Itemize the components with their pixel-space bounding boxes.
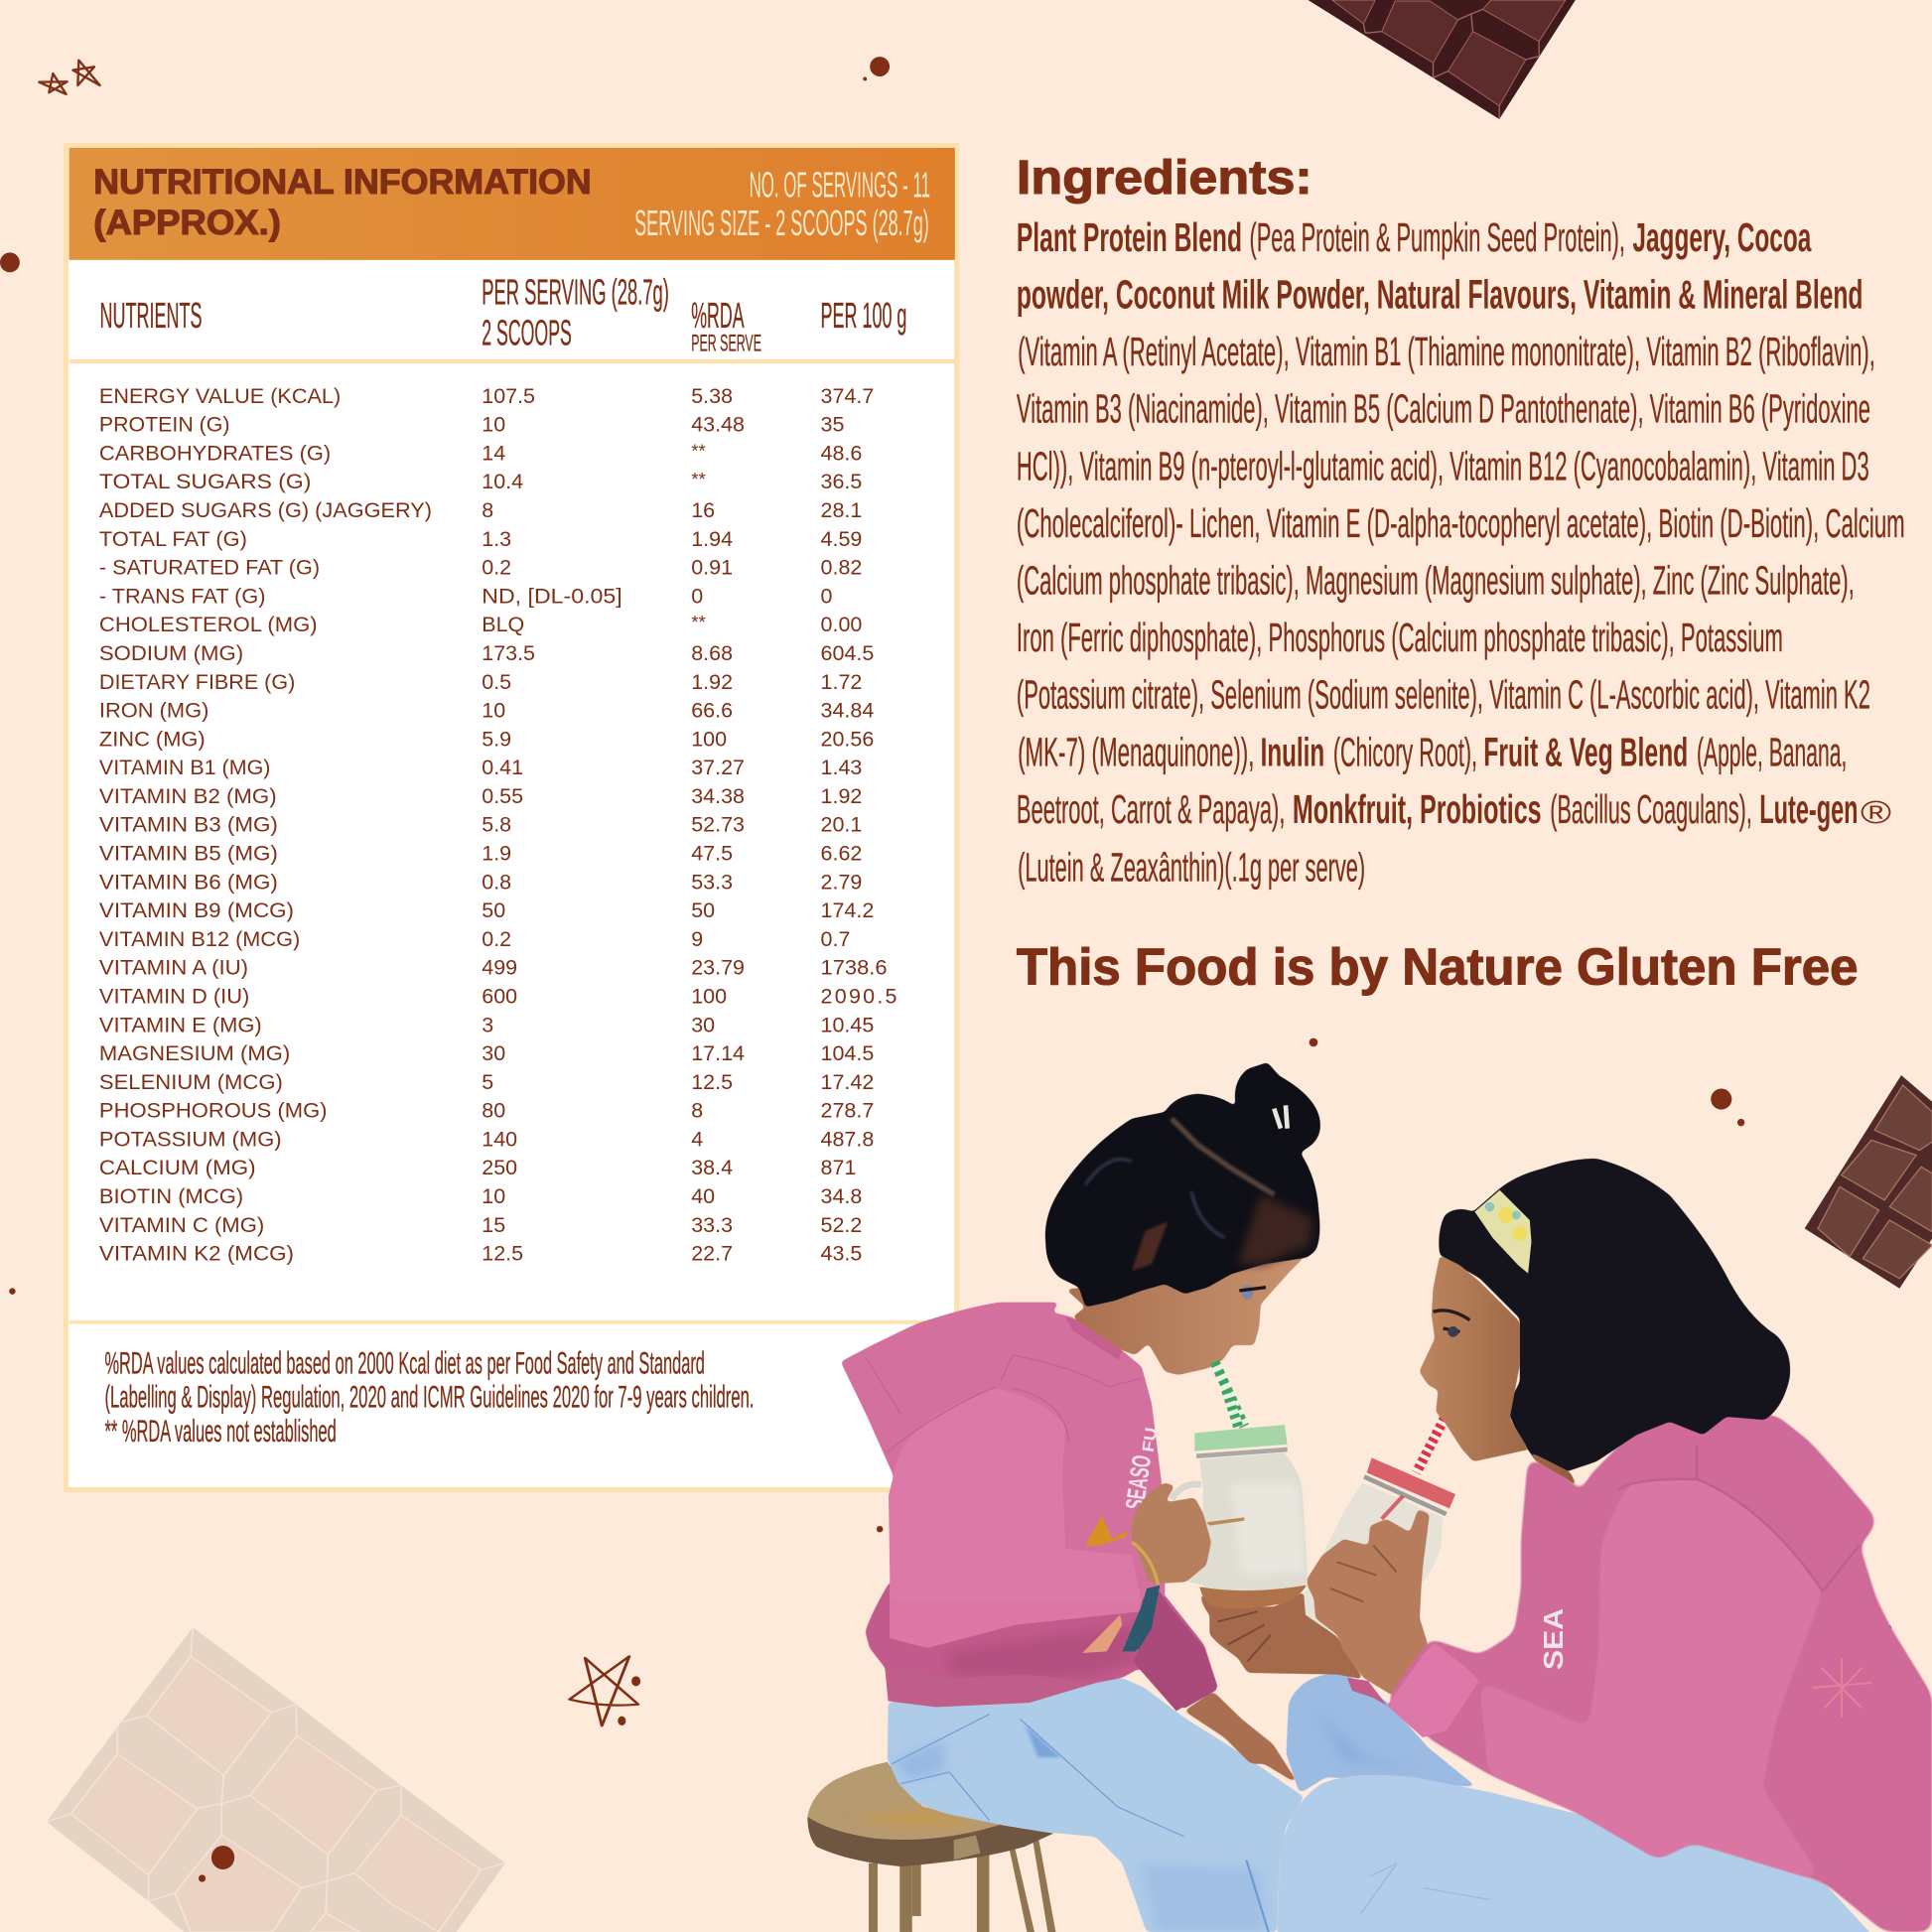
column: per 100 g values: 20.56 bbox=[821, 727, 874, 751]
girl left: upper hoodie: SEASO bbox=[1120, 1453, 1157, 1511]
girl right: hand on jar bbox=[1308, 1509, 1430, 1696]
column: per serving values: 0.41 bbox=[482, 756, 523, 779]
column: nutrient names: VITAMIN D (IU) bbox=[99, 984, 249, 1008]
column: nutrient names: TOTAL FAT (G) bbox=[99, 527, 247, 551]
column: per 100 g values: 174.2 bbox=[821, 898, 874, 922]
decorative splatter dots bbox=[0, 57, 1891, 1630]
column: percent RDA values: 33.3 bbox=[691, 1213, 733, 1237]
column: per 100 g values: 2.79 bbox=[821, 870, 862, 894]
column: per 100 g values: 487.8 bbox=[821, 1127, 874, 1151]
column: per 100 g values: 0.82 bbox=[821, 556, 862, 580]
column: per 100 g values: 104.5 bbox=[821, 1041, 874, 1065]
column headings bbox=[100, 272, 906, 356]
girl left: hand on knee bbox=[1184, 1691, 1300, 1785]
girl left: face bbox=[1065, 1254, 1308, 1427]
text block: ingredients list: (Bacillus Coagulans), bbox=[1550, 786, 1752, 832]
panel: nutrition table: PER 100 g bbox=[821, 295, 906, 336]
column: nutrient names: TOTAL SUGARS (G) bbox=[99, 470, 311, 493]
column: per serving values: 107.5 bbox=[482, 384, 535, 408]
column: percent RDA values: ** bbox=[691, 469, 706, 489]
column: nutrient names: CHOLESTEROL (MG) bbox=[99, 613, 318, 636]
column: percent RDA values: 8.68 bbox=[691, 641, 733, 665]
column: per serving values: 80 bbox=[482, 1099, 505, 1123]
column: per serving values: 250 bbox=[482, 1156, 517, 1179]
text block: ingredients list: Plant Protein Blend bbox=[1017, 214, 1242, 260]
column: per 100 g values: 52.2 bbox=[821, 1213, 862, 1237]
heading: nutritional information: (APPROX.) bbox=[93, 205, 281, 242]
column: per serving values: 30 bbox=[482, 1041, 505, 1065]
column: per 100 g values: 0 bbox=[821, 584, 833, 608]
column: nutrient names: BIOTIN (MCG) bbox=[99, 1184, 243, 1208]
column: percent RDA values: ** bbox=[691, 440, 706, 461]
text block: ingredients list: Fruit & Veg Blend bbox=[1483, 729, 1688, 774]
column: percent RDA values: 37.27 bbox=[691, 756, 745, 779]
column: per serving values: 10 bbox=[482, 1184, 505, 1208]
column: per serving values: 5.8 bbox=[482, 813, 511, 837]
column: percent RDA values: 16 bbox=[691, 498, 715, 522]
polka dot patch bbox=[1082, 1615, 1122, 1653]
icon: faded chocolate bar and doodle star bottom left bbox=[47, 1627, 640, 1932]
girl left: upper hoodie: FU bbox=[1139, 1426, 1161, 1453]
column: nutrient names: VITAMIN C (MG) bbox=[99, 1213, 264, 1237]
column: nutrient names: ENERGY VALUE (KCAL) bbox=[99, 384, 341, 408]
column: per 100 g values: 374.7 bbox=[821, 384, 874, 408]
column: percent RDA values: 52.73 bbox=[691, 813, 745, 837]
footnote: ** %RDA values not established bbox=[104, 1414, 337, 1449]
girl left: upper hoodie bbox=[841, 1303, 1165, 1601]
footnote: %RDA values calculated based on 2000 Kcal diet as per Food Safety and Standard bbox=[104, 1345, 705, 1380]
column: percent RDA values bbox=[691, 384, 745, 1266]
column: per 100 g values: 1.43 bbox=[821, 756, 862, 779]
column: per serving values: 0.8 bbox=[482, 870, 511, 894]
bracelet bbox=[1132, 1586, 1160, 1650]
column: nutrient names: - SATURATED FAT (G) bbox=[99, 556, 320, 580]
headband bbox=[1474, 1190, 1532, 1274]
hoodie seams bbox=[1618, 1445, 1860, 1591]
servings info: SERVING SIZE - 2 SCOOPS (28.7g) bbox=[634, 203, 929, 243]
drinking jar left bbox=[1172, 1390, 1308, 1608]
column: nutrient names: VITAMIN E (MG) bbox=[99, 1013, 262, 1036]
heading: ingredients: Ingredients: bbox=[1017, 151, 1312, 205]
girl left: hair and bun bbox=[1045, 1062, 1320, 1308]
column: percent RDA values: 17.14 bbox=[691, 1041, 745, 1065]
text block: ingredients list bbox=[1017, 214, 1905, 890]
column: per serving values: 10.4 bbox=[482, 470, 523, 493]
column: per 100 g values: 278.7 bbox=[821, 1099, 874, 1123]
heading: nutritional information bbox=[93, 164, 592, 242]
column: per 100 g values: 0.00 bbox=[821, 613, 862, 636]
column: per 100 g values: 1.72 bbox=[821, 670, 862, 694]
column: nutrient names: DIETARY FIBRE (G) bbox=[99, 670, 295, 694]
column: percent RDA values: 34.38 bbox=[691, 784, 745, 808]
text block: ingredients list: Beetroot, Carrot & Papaya), bbox=[1017, 786, 1285, 832]
column: nutrient names: VITAMIN B1 (MG) bbox=[99, 756, 270, 779]
column: percent RDA values: 40 bbox=[691, 1184, 715, 1208]
column: per 100 g values: 48.6 bbox=[821, 441, 862, 465]
column: percent RDA values: 5.38 bbox=[691, 384, 733, 408]
column: per 100 g values: 36.5 bbox=[821, 470, 862, 493]
column: per serving values: 14 bbox=[482, 441, 505, 465]
column: nutrient names: IRON (MG) bbox=[99, 699, 208, 723]
column: per 100 g values: 6.62 bbox=[821, 842, 862, 866]
column: percent RDA values: 30 bbox=[691, 1013, 715, 1036]
right cuff bbox=[1387, 1643, 1479, 1737]
panel: nutrition table bbox=[66, 145, 957, 1489]
column: percent RDA values: 4 bbox=[691, 1127, 703, 1151]
table header band: NO. OF SERVINGS - 11 bbox=[750, 165, 930, 206]
column: per serving values: 50 bbox=[482, 898, 505, 922]
hands and jars bbox=[1132, 1390, 1455, 1710]
star print on back bbox=[1812, 1658, 1871, 1718]
column: per serving values: 0.2 bbox=[482, 556, 511, 580]
column: per serving values: 140 bbox=[482, 1127, 517, 1151]
column: per 100 g values: 2090.5 bbox=[821, 984, 897, 1008]
column: per 100 g values: 871 bbox=[821, 1156, 856, 1179]
table header band bbox=[69, 148, 955, 260]
column: percent RDA values: 50 bbox=[691, 898, 715, 922]
text block: ingredients list: Jaggery, Cocoa bbox=[1632, 214, 1812, 260]
column: percent RDA values: 9 bbox=[691, 927, 703, 951]
text block: ingredients list: (Chicory Root), bbox=[1333, 729, 1477, 774]
column: percent RDA values: 1.92 bbox=[691, 670, 733, 694]
girl right: hair face and headband bbox=[1419, 1159, 1790, 1490]
column: percent RDA values: 100 bbox=[691, 984, 727, 1008]
drinking jar right bbox=[1304, 1418, 1455, 1636]
text block: ingredients list: ® bbox=[1861, 794, 1891, 830]
column: percent RDA values: ** bbox=[691, 612, 706, 632]
column headings: PER SERVE bbox=[691, 331, 761, 356]
column: nutrient names: VITAMIN B9 (MCG) bbox=[99, 898, 294, 922]
icon: chocolate piece right bbox=[1805, 1075, 1932, 1289]
text block: ingredients list: Inulin bbox=[1261, 729, 1324, 774]
column: per 100 g values: 0.7 bbox=[821, 927, 850, 951]
text block: ingredients list: (Lutein & Zeaxânthin)(.1g per serve) bbox=[1018, 844, 1365, 890]
column: percent RDA values: 66.6 bbox=[691, 699, 733, 723]
column: nutrient names: ADDED SUGARS (G) (JAGGERY) bbox=[99, 498, 432, 522]
column: per serving values: 600 bbox=[482, 984, 517, 1008]
column: per serving values: 0.55 bbox=[482, 784, 523, 808]
column headings: %RDA bbox=[691, 295, 745, 336]
column: percent RDA values: 22.7 bbox=[691, 1242, 733, 1266]
column: nutrient names: VITAMIN A (IU) bbox=[99, 956, 248, 980]
column headings: NUTRIENTS bbox=[100, 295, 203, 336]
column: per serving values: 1.3 bbox=[482, 527, 511, 551]
column: per 100 g values: 34.8 bbox=[821, 1184, 862, 1208]
column: nutrient names: VITAMIN B3 (MG) bbox=[99, 813, 278, 837]
column: nutrient names: VITAMIN B2 (MG) bbox=[99, 784, 277, 808]
column: per serving values: 12.5 bbox=[482, 1242, 523, 1266]
column: per 100 g values: 28.1 bbox=[821, 498, 862, 522]
icon: chocolate bar top bbox=[1309, 0, 1576, 119]
column: percent RDA values: 23.79 bbox=[691, 956, 745, 980]
column: nutrient names: - TRANS FAT (G) bbox=[99, 584, 265, 608]
column: per 100 g values: 1738.6 bbox=[821, 956, 888, 980]
column: nutrient names: POTASSIUM (MG) bbox=[99, 1127, 282, 1151]
column: per 100 g values: 4.59 bbox=[821, 527, 862, 551]
column: per serving values: 5 bbox=[482, 1070, 493, 1094]
icon: doodle stars top left bbox=[39, 61, 100, 94]
column: percent RDA values: 12.5 bbox=[691, 1070, 733, 1094]
girl right: lower palm bbox=[1199, 1591, 1363, 1680]
photo illustration: two girls sharing drinks bbox=[807, 1062, 1932, 1932]
column: percent RDA values: 43.48 bbox=[691, 413, 745, 437]
column: per 100 g values: 1.92 bbox=[821, 784, 862, 808]
floral bracelet cuff bbox=[1122, 1588, 1160, 1651]
column: per serving values: 499 bbox=[482, 956, 517, 980]
hair bbox=[1439, 1159, 1790, 1471]
column: percent RDA values: 100 bbox=[691, 727, 727, 751]
bangle bbox=[1132, 1542, 1159, 1586]
servings info bbox=[634, 165, 930, 243]
column: nutrient names: VITAMIN B5 (MG) bbox=[99, 842, 278, 866]
column: percent RDA values: 1.94 bbox=[691, 527, 733, 551]
column: percent RDA values: 47.5 bbox=[691, 842, 733, 866]
column: per 100 g values: 43.5 bbox=[821, 1242, 862, 1266]
text block: ingredients list: Monkfruit, Probiotics bbox=[1293, 786, 1542, 832]
hoodie upper body bbox=[1386, 1414, 1932, 1932]
hoodie sleeve bbox=[1479, 1479, 1824, 1882]
column: per serving values: 173.5 bbox=[482, 641, 535, 665]
column: per serving values: 5.9 bbox=[482, 727, 511, 751]
column: per 100 g values: 34.84 bbox=[821, 699, 874, 723]
girl right: hoodie bbox=[1347, 1414, 1932, 1932]
girl right: front knee jeans bbox=[1278, 1711, 1876, 1932]
heading: gluten free statement: This Food is by Nature Gluten Free bbox=[1017, 939, 1859, 997]
column: per serving values: 0.5 bbox=[482, 670, 511, 694]
girl right: back leg jeans bbox=[1287, 1673, 1476, 1794]
column: nutrient names: VITAMIN B6 (MG) bbox=[99, 870, 278, 894]
heading: nutritional information: NUTRITIONAL INFORMATION bbox=[93, 164, 592, 202]
column: per serving values: ND, [DL-0.05] bbox=[482, 584, 622, 608]
column: nutrient names: CARBOHYDRATES (G) bbox=[99, 441, 331, 465]
column: nutrient names: PROTEIN (G) bbox=[99, 413, 229, 437]
column: nutrient names bbox=[99, 384, 432, 1266]
footnote bbox=[104, 1345, 755, 1449]
column: nutrient names: MAGNESIUM (MG) bbox=[99, 1041, 290, 1065]
column: per serving values: BLQ bbox=[482, 613, 524, 636]
girl left: hand on jar bbox=[1132, 1482, 1211, 1584]
column: per serving values: 15 bbox=[482, 1213, 505, 1237]
column: per 100 g values: 604.5 bbox=[821, 641, 874, 665]
face bbox=[1419, 1255, 1580, 1490]
column: per 100 g values: 35 bbox=[821, 413, 844, 437]
column: nutrient names: SELENIUM (MCG) bbox=[99, 1070, 283, 1094]
column: nutrient names: SODIUM (MG) bbox=[99, 641, 243, 665]
column: nutrient names: PHOSPHOROUS (MG) bbox=[99, 1099, 328, 1123]
column: per 100 g values: 20.1 bbox=[821, 813, 862, 837]
column: per 100 g values: 10.45 bbox=[821, 1013, 874, 1036]
column: per 100 g values bbox=[821, 384, 897, 1266]
column: per serving values: 10 bbox=[482, 699, 505, 723]
text block: ingredients list: (MK-7) (Menaquinone)), bbox=[1018, 729, 1254, 774]
column: percent RDA values: 8 bbox=[691, 1099, 703, 1123]
column: nutrient names: ZINC (MG) bbox=[99, 727, 206, 751]
girl left: jeans bbox=[888, 1678, 1304, 1932]
column: percent RDA values: 0 bbox=[691, 584, 703, 608]
column: percent RDA values: 38.4 bbox=[691, 1156, 733, 1179]
column: percent RDA values: 0.91 bbox=[691, 556, 733, 580]
column: percent RDA values: 53.3 bbox=[691, 870, 733, 894]
column: per serving values bbox=[482, 384, 622, 1266]
text block: ingredients list: Lute-gen bbox=[1759, 786, 1859, 832]
stool bbox=[807, 1762, 1055, 1932]
column: per serving values: 3 bbox=[482, 1013, 493, 1036]
column: nutrient names: CALCIUM (MG) bbox=[99, 1156, 256, 1179]
girl left: cuff and arm bbox=[1132, 1588, 1218, 1710]
column headings: 2 SCOOPS bbox=[482, 312, 572, 352]
eye and brow bbox=[1434, 1311, 1469, 1331]
column: per serving values: 10 bbox=[482, 413, 505, 437]
column: per serving values: 0.2 bbox=[482, 927, 511, 951]
column: nutrient names: VITAMIN K2 (MCG) bbox=[99, 1242, 294, 1266]
column: nutrient names: VITAMIN B12 (MCG) bbox=[99, 927, 300, 951]
footnote: (Labelling & Display) Regulation, 2020 and ICMR Guidelines 2020 for 7-9 years children. bbox=[104, 1379, 755, 1414]
column: per 100 g values: 17.42 bbox=[821, 1070, 874, 1094]
jeans bbox=[888, 1673, 1876, 1932]
sweatshirt print: SEA bbox=[1538, 1608, 1569, 1670]
column: per serving values: 1.9 bbox=[482, 842, 511, 866]
column: per serving values: 8 bbox=[482, 498, 493, 522]
girl left: lower hoodie bbox=[865, 1582, 1217, 1711]
column headings: PER SERVING (28.7g) bbox=[482, 272, 669, 313]
